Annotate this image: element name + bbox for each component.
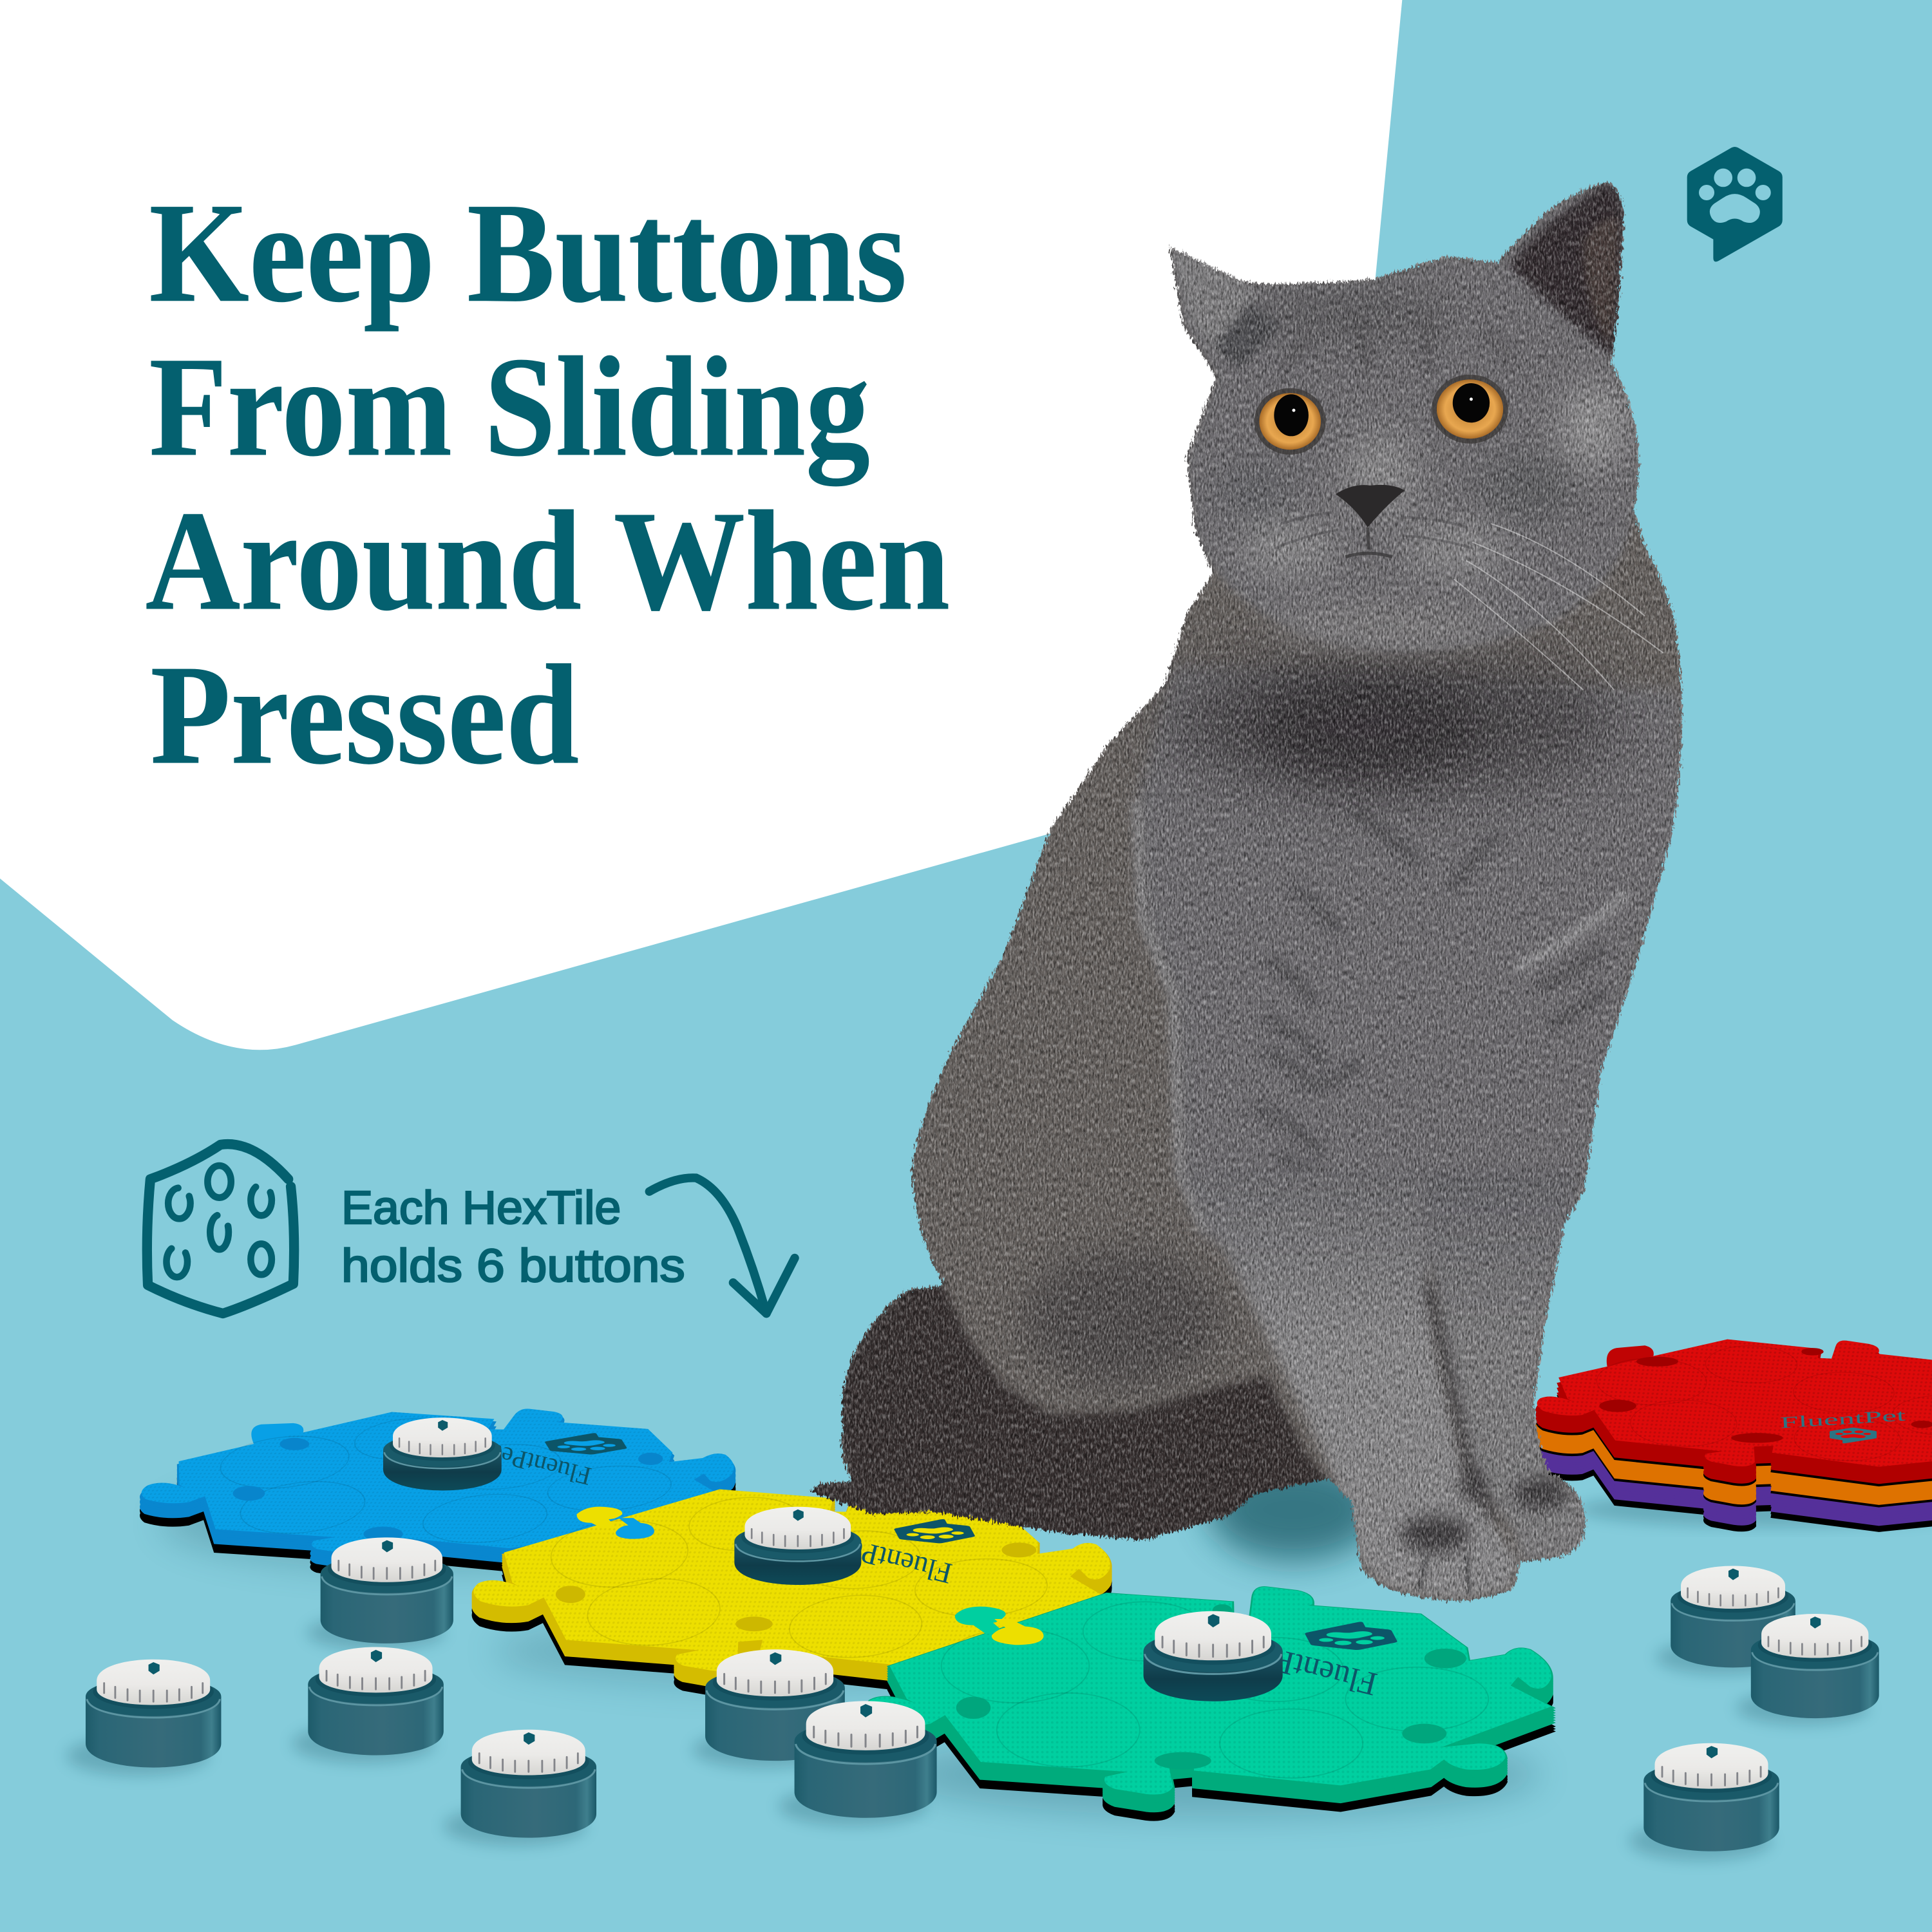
tile brand logo [1830,1428,1877,1443]
title: Keep [149,174,435,332]
tile logo [889,1519,978,1544]
chest fur stripes [1257,813,1602,1201]
red tile notches [1599,1348,1932,1443]
title: When [614,482,950,640]
title: Pressed [150,636,579,794]
gap between forelegs [1427,1282,1493,1518]
button on yellow tile [734,1507,861,1585]
left foreleg [1183,1171,1519,1600]
red, orange and purple tile stack [1527,1327,1932,1544]
loose button 7 [1671,1566,1795,1667]
red rear tab [1607,1345,1654,1370]
tile logo [540,1432,630,1455]
mouth [1345,527,1392,557]
white headline panel [0,0,1402,1050]
blue tile [106,1406,770,1578]
left ear [1170,247,1257,357]
paw markings [1401,1468,1567,1553]
loose button 5 [705,1649,845,1761]
tile logo [1300,1621,1401,1651]
title: Around [146,482,582,640]
yellow connector tab over blue tile [576,1507,622,1528]
blue tile notches [233,1438,663,1541]
title [146,174,950,794]
yellow tile [454,1481,1130,1698]
head shading [1220,287,1625,643]
chest light line [1515,893,1627,969]
blue connector tab over yellow tile [616,1518,654,1539]
loose button 1 [86,1660,221,1768]
tile brand name: FluentPet [1779,1407,1906,1432]
tile brand name: FluentPet [1247,1636,1381,1703]
right ear inner [1584,218,1619,345]
yellow connector tab over green tile [992,1619,1044,1645]
left eye [1255,388,1326,455]
loose button 2 [308,1647,444,1755]
neck shadow [1164,647,1620,795]
title: Sliding [484,328,870,486]
loose button 8 [1751,1614,1879,1718]
loose button 4 [321,1537,453,1643]
right eye [1432,375,1508,444]
title: From [149,328,452,486]
green connector tab over yellow tile [955,1607,1006,1634]
loose button 9 [1643,1743,1779,1852]
forehead streaks [1282,323,1515,372]
loose button 6 [795,1701,937,1818]
title: Buttons [467,174,907,332]
right ear [1510,182,1624,357]
cat photo illustration [788,173,1700,1614]
nose [1336,485,1405,527]
whiskers [1454,524,1663,690]
caption: each HexTile holds 6 buttons: Each HexTile [341,1182,621,1234]
cat silhouette base [788,173,1700,1614]
button on blue tile [383,1417,502,1490]
yellow tile notches [556,1542,1036,1631]
tile brand name: FluentPet [837,1531,955,1591]
haunch lighter edge [1136,801,1205,1232]
button on green tile [1144,1611,1283,1701]
right foreleg [1422,1171,1589,1562]
caption: each HexTile holds 6 buttons [341,1182,685,1292]
toe lines [1419,1555,1469,1592]
chest [1136,665,1682,1269]
blue rear tab [251,1423,303,1449]
whisker pad markings [1275,513,1472,548]
haunch lower shadow [1023,1251,1220,1386]
caption: each HexTile holds 6 buttons: holds 6 buttons [341,1240,685,1292]
cat face details [1255,375,1663,690]
loose button 3 [461,1730,596,1838]
arrow: curving down to the tiles [649,1178,795,1314]
button shadows [66,1615,1869,1861]
green tile notches [956,1604,1466,1769]
tail [801,1275,1333,1546]
icon: FluentPet paw speech-bubble logo [1687,147,1783,261]
head [1170,182,1639,651]
cat floor shadow [1208,1457,1380,1561]
green tile [867,1587,1551,1819]
icon: hex tile with six button slots [147,1144,294,1314]
tile brand name: FluentPet [491,1439,594,1492]
